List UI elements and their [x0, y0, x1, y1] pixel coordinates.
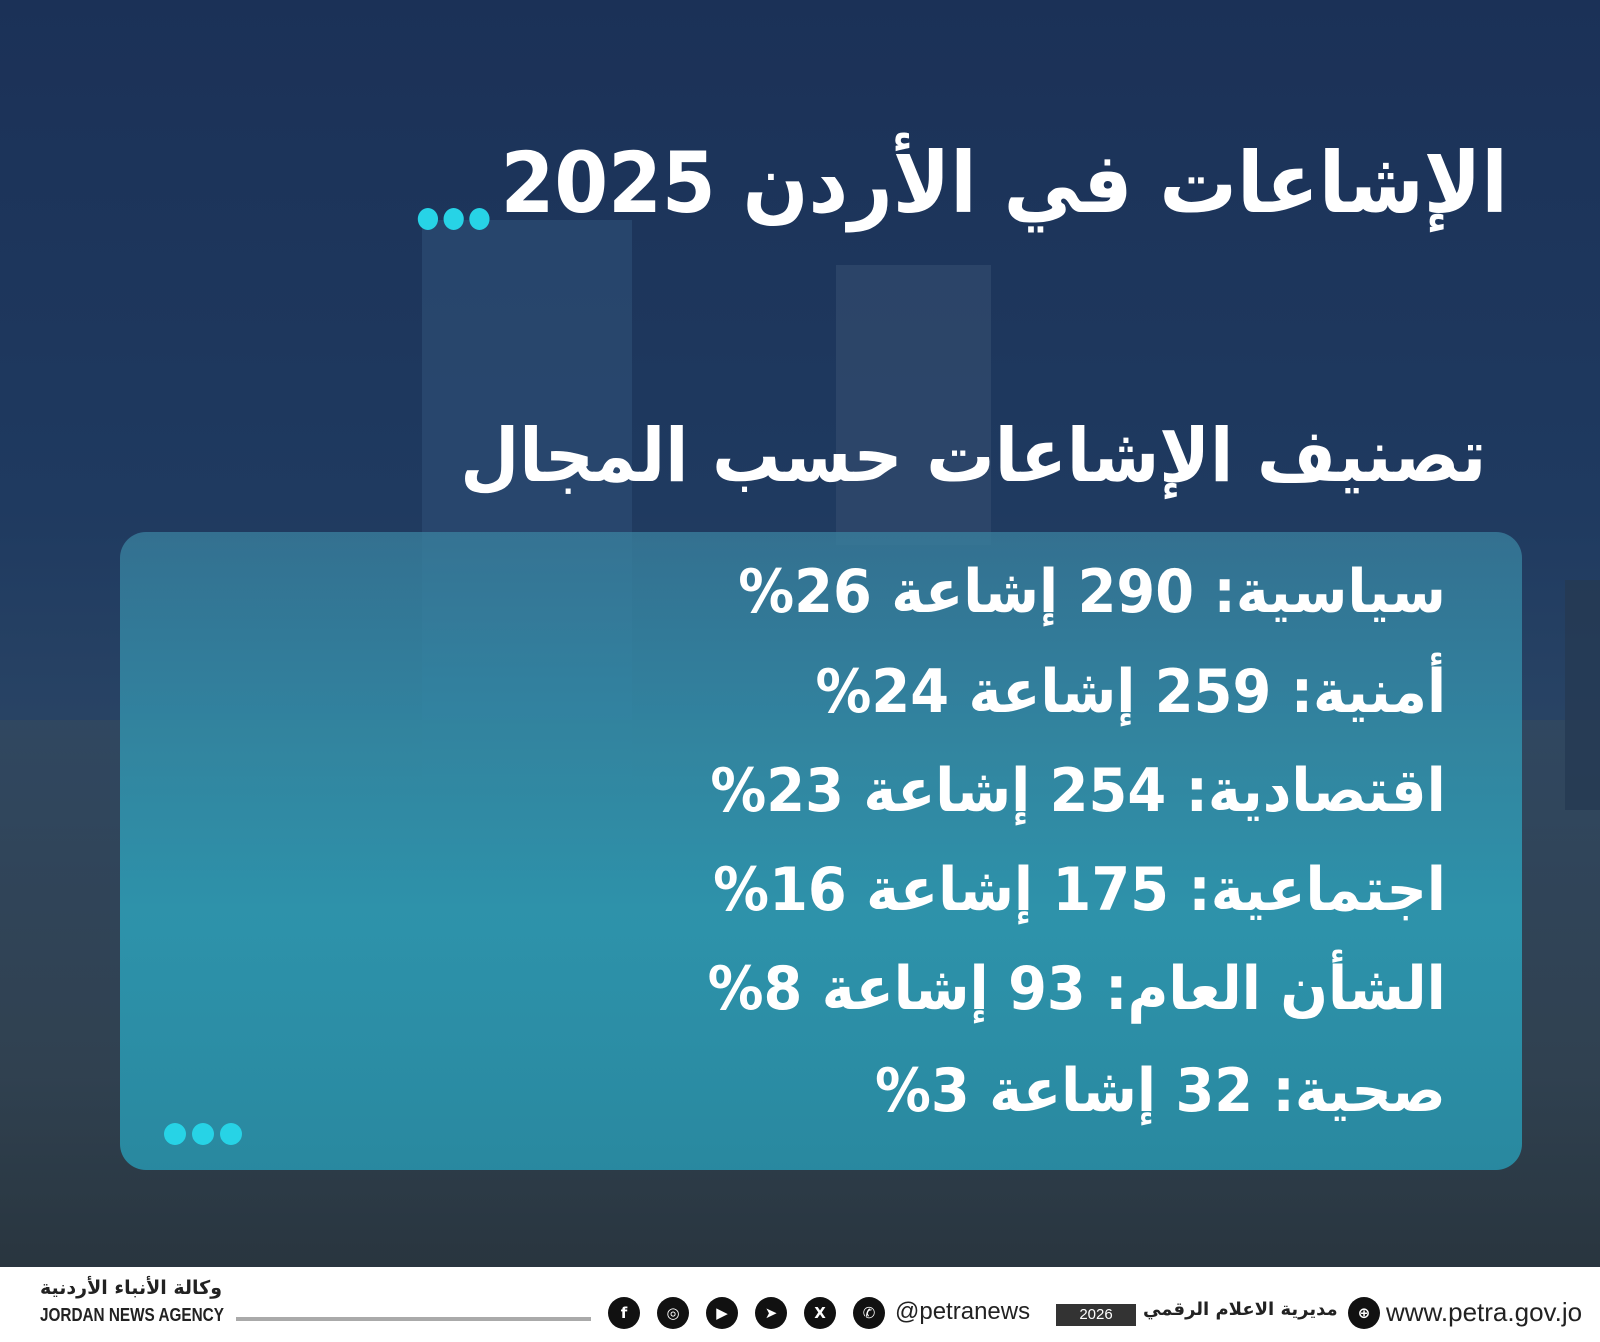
row: social: اجتماعية: 175 إشاعة %16 — [713, 855, 1446, 925]
social icons — [608, 1297, 640, 1329]
text: X — [814, 1304, 826, 1322]
subtitle: تصنيف الإشاعات حسب المجال — [460, 413, 1486, 499]
row: economic: اقتصادية: 254 إشاعة %23 — [711, 756, 1446, 826]
row: health: صحية: 32 إشاعة %3 — [875, 1056, 1446, 1126]
footer: JORDAN NEWS AGENCY — [40, 1305, 224, 1325]
text: ✆ — [863, 1304, 875, 1322]
text: ⊕ — [1358, 1304, 1370, 1322]
decorative dots — [164, 1123, 242, 1145]
contact text: @petranews — [895, 1298, 1030, 1325]
row: political: سياسية: 290 إشاعة %26 — [738, 557, 1446, 627]
footer: 2026 — [1079, 1306, 1113, 1323]
text: ◎ — [666, 1304, 680, 1322]
row: security: أمنية: 259 إشاعة %24 — [815, 657, 1446, 727]
agency logo text: وكالة الأنباء الأردنية — [40, 1277, 222, 1299]
footer — [0, 1267, 1600, 1342]
footer: مديرية الاعلام الرقمي — [1143, 1299, 1338, 1320]
text: ➤ — [765, 1304, 777, 1322]
title: الإشاعات في الأردن 2025 — [501, 134, 1508, 232]
social icons: f — [621, 1304, 627, 1322]
panel: categories — [120, 532, 1522, 1170]
footer: www.petra.gov.jo — [1386, 1297, 1582, 1327]
row: public affairs: الشأن العام: 93 إشاعة %8 — [708, 954, 1446, 1024]
text: ▶ — [716, 1304, 728, 1322]
